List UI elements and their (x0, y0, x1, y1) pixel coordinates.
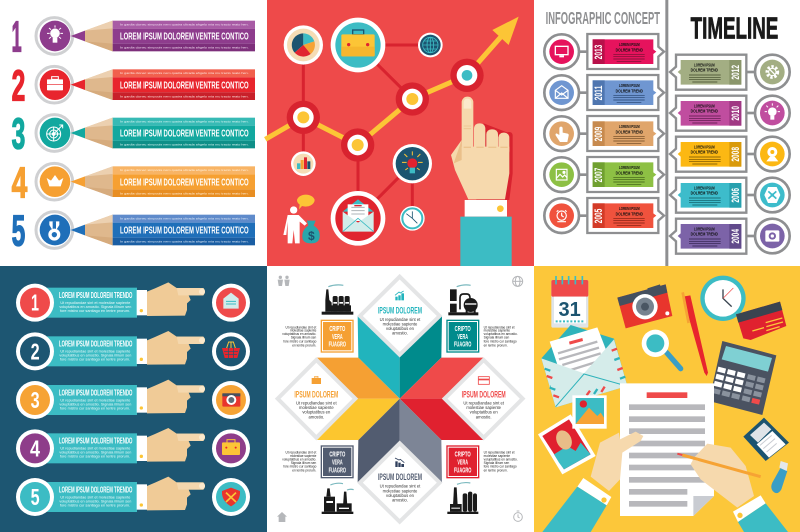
icon: home (277, 512, 287, 522)
pencil row 1 (12, 14, 255, 62)
hand row 5: fore mistro cur santiago en lentre prorum. (60, 503, 130, 507)
timeline item 2009: LOREM IPSUM (619, 124, 640, 130)
side paragraph top left (282, 325, 317, 347)
side paragraph top left: molestiae sapiente (290, 329, 317, 333)
side paragraph top right: Ut repudiandae sint et (484, 325, 515, 329)
hand row 3: 3 (31, 387, 40, 413)
hand row 4: Ut repudiandae sint et molestiae sapiente (60, 447, 130, 451)
icon: camera (222, 393, 240, 407)
icon: clock (400, 206, 425, 231)
timeline item 2006: 2006 (730, 188, 742, 203)
square: top left label: FUAGRO (329, 342, 346, 349)
usb stick (771, 461, 788, 493)
icon: factory bottom left (322, 483, 354, 514)
icon: businessman (283, 206, 307, 243)
hand row 2 (16, 331, 250, 370)
envelope (541, 325, 627, 407)
hand shadow (467, 123, 513, 200)
square: bottom left label (321, 446, 353, 478)
pencil row 2: 2 (12, 62, 25, 110)
icon: globe (418, 33, 443, 57)
diamond top: Ut repudiandae sint et (380, 317, 421, 322)
timeline item 2012 (670, 55, 790, 90)
right hand with pencil (677, 444, 788, 532)
hand row 4: 4 (30, 435, 40, 461)
side paragraph bottom left: molestiae sapiente (290, 454, 317, 458)
timeline item 2007 (544, 157, 664, 192)
square: bottom right label: VERA (457, 460, 468, 467)
pencil row 2 (12, 62, 255, 110)
panel: timeline (534, 0, 800, 266)
side paragraph bottom left (282, 451, 317, 473)
hand row 1: voluptatibus en amostio. Signala illirum sen (59, 305, 131, 309)
suit sleeve (460, 217, 512, 266)
hand row 5: voluptatibus en amostio. Signala illirum sen (59, 499, 131, 503)
hand row 3: fore mistro cur santiago en lentre prorum. (60, 406, 130, 410)
pencil row 1: 1 (12, 14, 22, 62)
icon: basket (222, 342, 240, 358)
timeline item 2004: 2004 (730, 229, 742, 244)
diamond left: molestiae sapiente (299, 405, 334, 410)
icon: briefcase (47, 77, 63, 90)
icon: money bag (302, 221, 320, 243)
timeline item 2005: DOLREM TREND (616, 211, 643, 217)
icon: briefcase (222, 440, 240, 455)
square: top left label: CRIPTO (329, 326, 346, 333)
panel: pencil list (0, 0, 267, 266)
hand row 2: LOREM IPSUM DOLOREM TRENDO (59, 340, 132, 349)
hand row 4 (16, 428, 250, 467)
icon: rising bars (395, 291, 404, 300)
icon: briefcase (331, 18, 385, 72)
square: top right label: CRIPTO (455, 326, 471, 333)
pencil row 3 (12, 111, 255, 159)
timeline item 2010: 2010 (730, 106, 742, 121)
timeline item 2011: DOLREM TREND (616, 88, 643, 94)
hand row 3 (16, 380, 250, 419)
icon: crown (47, 175, 63, 186)
hand row 3: Ut repudiandae sint et molestiae sapiente (60, 398, 130, 402)
icon: people (278, 276, 290, 286)
icon: target (46, 125, 63, 141)
side paragraph top left: Ut repudiandae sint et (285, 325, 316, 329)
side paragraph bottom right: Signala illirum sen (484, 461, 510, 465)
pencil row 5: In gardia clonec simpoois nem quatra ultrada ahgelo mia mu tracto reato hen. (120, 216, 249, 220)
timeline item 2007: LOREM IPSUM (619, 165, 640, 171)
diamond left: IPSUM DOLOREM (294, 389, 338, 399)
hand row 2: fore mistro cur santiago en lentre prorum. (60, 358, 130, 362)
diamond top: amostio. (392, 331, 408, 336)
line chart with arrow (265, 17, 519, 162)
timeline item 2007: DOLREM TREND (616, 170, 643, 176)
side paragraph top right: voluptatibus en amostio. (484, 332, 518, 336)
pencil row 4: LOREM IPSUM DOLOREM VENTRE CONTICO (120, 177, 249, 188)
floppy disk (743, 418, 789, 461)
side paragraph bottom right: molestiae sapiente (484, 454, 510, 458)
timeline item 2005 (544, 198, 664, 233)
side paragraph top right: en lentre prorum. (484, 343, 508, 347)
timeline item 2004: DOLREM TREND (691, 232, 718, 238)
side paragraph bottom right (484, 451, 518, 473)
side paragraph bottom left: en lentre prorum. (292, 469, 316, 473)
left hand with sleeve (542, 432, 643, 532)
pencil row 1: LOREM IPSUM DOLOREM VENTRE CONTICO (120, 32, 249, 43)
timeline item 2008: 2008 (730, 147, 742, 162)
icon: webcam (766, 147, 778, 161)
timeline item 2008 (670, 137, 790, 172)
diamond right: molestiae sapiente (466, 405, 502, 410)
panel: star diagram (267, 266, 534, 532)
timeline item 2006: DOLREM TREND (691, 191, 718, 197)
pencil row 1: In gardia clonec simpoois nem quatra ultrada ahgelo mia mu tracto reato hen. (120, 46, 249, 50)
heading: infographic concept: INFOGRAPHIC CONCEPT (546, 8, 660, 28)
side paragraph top right (484, 325, 518, 347)
pencil row 5 (12, 208, 255, 256)
side paragraph top left: Signala illirum sen (291, 336, 317, 340)
hand row 2: voluptatibus en amostio. Signala illirum sen (59, 354, 131, 358)
icon: card (478, 377, 489, 384)
hand row 3: voluptatibus en amostio. Signala illirum sen (59, 402, 131, 406)
shirt cuff (465, 200, 507, 217)
pencil row 4 (12, 159, 255, 207)
side paragraph bottom left: voluptatibus en amostio. (282, 457, 316, 461)
pencil row 1: In gardia clonec simpoois nem quatra ultrada ahgelo mia mu tracto reato hen. (120, 22, 249, 26)
diamond bottom: IPSUM DOLOREM (378, 472, 422, 482)
square: bottom left label: CRIPTO (329, 452, 346, 459)
square: bottom right label: CRIPTO (455, 452, 471, 459)
timeline item 2011: 2011 (593, 86, 605, 100)
hand row 4: voluptatibus en amostio. Signala illirum sen (59, 451, 131, 455)
icon: envelope (331, 191, 385, 246)
diamond top (360, 277, 440, 355)
side paragraph bottom right: Ut repudiandae sint et (484, 451, 515, 455)
divider (665, 0, 668, 266)
pencil row 2: LOREM IPSUM DOLOREM VENTRE CONTICO (120, 80, 249, 91)
square: bottom left label: FUAGRO (329, 467, 346, 474)
hand row 2: 2 (31, 338, 40, 364)
icon: briefcase (312, 376, 321, 384)
icon: bulb (47, 25, 63, 43)
camera (617, 284, 672, 328)
square: top left label (321, 320, 353, 352)
diamond top: molestiae sapiente (383, 321, 418, 326)
hand row 1: Ut repudiandae sint et molestiae sapiente (60, 301, 130, 305)
pencil row 2: In gardia clonec simpoois nem quatra ultrada ahgelo mia mu tracto reato hen. (120, 71, 249, 75)
side paragraph top right: molestiae sapiente (484, 329, 510, 333)
timeline item 2012: DOLREM TREND (691, 68, 718, 74)
timeline item 2013: DOLREM TREND (616, 47, 643, 53)
timeline item 2007: 2007 (593, 168, 605, 182)
diamond bottom: amostio. (392, 498, 408, 503)
diamond top: IPSUM DOLOREM (378, 305, 422, 315)
pencil row 5: In gardia clonec simpoois nem quatra ultrada ahgelo mia mu tracto reato hen. (120, 240, 249, 244)
timeline item 2010 (670, 96, 790, 131)
icon: envelope (555, 86, 568, 98)
landscape picture (572, 395, 607, 429)
icon: shield (222, 488, 240, 506)
timeline item 2013: LOREM IPSUM (619, 42, 640, 48)
diamond bottom: molestiae sapiente (383, 488, 418, 493)
side paragraph top right: fore mistro cur santiago (484, 339, 517, 343)
side paragraph bottom right: en lentre prorum. (484, 469, 508, 473)
pencil row 3: In gardia clonec simpoois nem quatra ultrada ahgelo mia mu tracto reato hen. (120, 143, 249, 147)
pointing hand (451, 97, 509, 199)
icon: alarm clock (557, 210, 567, 222)
diamond bottom (360, 443, 440, 522)
diamond right: IPSUM DOLOREM (462, 389, 506, 399)
pencil row 2: In gardia clonec simpoois nem quatra ultrada ahgelo mia mu tracto reato hen. (120, 94, 249, 98)
hand row 5: 5 (31, 484, 40, 510)
square: bottom right label: FUAGRO (454, 467, 472, 474)
diamond left: voluptatibus en (302, 410, 331, 415)
icon: stopwatch (514, 511, 522, 521)
pencil row 4: In gardia clonec simpoois nem quatra ultrada ahgelo mia mu tracto reato hen. (120, 191, 249, 195)
document (620, 383, 714, 516)
diamond left: amostio. (308, 414, 324, 419)
timeline item 2010: DOLREM TREND (691, 109, 718, 115)
square: top right label: FUAGRO (454, 342, 472, 349)
timeline item 2011: LOREM IPSUM (619, 83, 640, 89)
pen (681, 292, 708, 376)
icon: pie chart (284, 25, 323, 65)
timeline item 2005: LOREM IPSUM (619, 206, 640, 212)
square: bottom right label (447, 446, 479, 478)
connector lines (303, 45, 430, 218)
hand row 5: Ut repudiandae sint et molestiae sapiente (60, 495, 130, 499)
hand row 2: Ut repudiandae sint et molestiae sapiente (60, 350, 130, 354)
side paragraph bottom left: Ut repudiandae sint et (285, 451, 316, 455)
square: top right label (447, 320, 479, 352)
icon: speech bubble (297, 195, 315, 209)
square: top right label: VERA (457, 334, 468, 341)
diamond right: amostio. (476, 414, 492, 419)
diamond bottom: voluptatibus en (386, 493, 415, 498)
timeline item 2004: LOREM IPSUM (694, 226, 715, 232)
pencil row 5: LOREM IPSUM DOLOREM VENTRE CONTICO (120, 226, 249, 237)
calendar (551, 276, 588, 328)
icon: shield (764, 187, 780, 203)
icon: medal (48, 221, 60, 241)
side paragraph bottom right: voluptatibus en amostio. (484, 457, 518, 461)
hand row 1: LOREM IPSUM DOLOREM TRENDO (59, 291, 132, 300)
icon: bulb (765, 103, 780, 120)
timeline item 2006 (670, 178, 790, 213)
wall clock (700, 276, 746, 321)
icon: factory top left (322, 285, 353, 315)
icon: bar chart (291, 151, 316, 176)
timeline item 2012: 2012 (730, 65, 742, 80)
pencil row 3: LOREM IPSUM DOLOREM VENTRE CONTICO (120, 129, 249, 140)
diamond left (278, 360, 355, 438)
hand row 3: LOREM IPSUM DOLOREM TRENDO (59, 388, 132, 397)
icon: document (223, 293, 239, 309)
hand row 1 (16, 282, 250, 322)
diamond top: voluptatibus en (386, 326, 415, 331)
icon: globe corner (513, 276, 523, 286)
icon: monitor (555, 46, 569, 57)
side paragraph top left: voluptatibus en amostio. (282, 332, 316, 336)
square: bottom left label: VERA (332, 460, 343, 467)
side paragraph bottom left: Signala illirum sen (291, 461, 317, 465)
diamond right (445, 360, 523, 438)
side paragraph top left: en lentre prorum. (292, 343, 316, 347)
timeline item 2011 (544, 75, 664, 110)
timeline item 2006: LOREM IPSUM (694, 185, 715, 191)
timeline item 2013: 2013 (593, 45, 605, 59)
timeline item 2009: DOLREM TREND (616, 129, 643, 135)
timeline item 2008: LOREM IPSUM (694, 144, 715, 150)
side paragraph bottom left: fore mistro cur santiago (283, 465, 317, 469)
timeline item 2009 (544, 116, 664, 151)
hand row 5 (16, 477, 250, 516)
side paragraph top left: fore mistro cur santiago (283, 339, 317, 343)
hand row 5: LOREM IPSUM DOLOREM TRENDO (59, 485, 132, 494)
timeline item 2008: DOLREM TREND (691, 150, 718, 156)
icon: camera (765, 230, 779, 242)
icon: picture (556, 169, 567, 180)
timeline item 2010: LOREM IPSUM (694, 103, 715, 109)
hand row 1: 1 (31, 290, 39, 316)
credit card (736, 302, 786, 340)
timeline item 2013 (544, 34, 664, 69)
icon: idea bulb (393, 144, 432, 183)
hand row 1: fore mistro cur santiago en lentre prorum. (60, 309, 130, 313)
diamond right: voluptatibus en (470, 410, 498, 415)
star petals (317, 316, 484, 483)
timeline item 2009: 2009 (593, 127, 605, 141)
portrait photo (538, 414, 596, 474)
icon: factory top right (448, 285, 478, 315)
icon: factory bottom right (447, 483, 478, 514)
pencil row 4: 4 (12, 159, 27, 207)
icon: falling bars (395, 458, 404, 467)
pencil row 3: In gardia clonec simpoois nem quatra ultrada ahgelo mia mu tracto reato hen. (120, 119, 249, 123)
calendar: 31 (559, 299, 581, 321)
pencil row 3: 3 (12, 111, 25, 159)
diamond left: Ut repudiandae sint et (296, 400, 338, 405)
pencil row 5: 5 (12, 208, 25, 256)
diamond bottom: Ut repudiandae sint et (380, 484, 421, 489)
magnifier (642, 330, 681, 369)
pencil row 4: In gardia clonec simpoois nem quatra ultrada ahgelo mia mu tracto reato hen. (120, 168, 249, 172)
diamond right: Ut repudiandae sint et (463, 400, 505, 405)
icon: touch hand (555, 127, 569, 142)
panel: desk flat lay (534, 266, 800, 532)
timeline item 2004 (670, 219, 790, 254)
hand row 4: LOREM IPSUM DOLOREM TRENDO (59, 437, 132, 446)
panel: growth chart (265, 0, 534, 266)
timeline item 2012: LOREM IPSUM (694, 62, 715, 68)
side paragraph top right: Signala illirum sen (484, 336, 510, 340)
timeline item 2005: 2005 (593, 209, 605, 223)
icon: gear (767, 67, 778, 77)
calculator (709, 341, 776, 415)
icon: money bag: $ (308, 229, 315, 243)
hand row 4: fore mistro cur santiago en lentre prorum. (60, 455, 130, 459)
side paragraph bottom right: fore mistro cur santiago (484, 465, 517, 469)
panel: pointing hands list (0, 266, 267, 532)
square: top left label: VERA (332, 334, 343, 341)
